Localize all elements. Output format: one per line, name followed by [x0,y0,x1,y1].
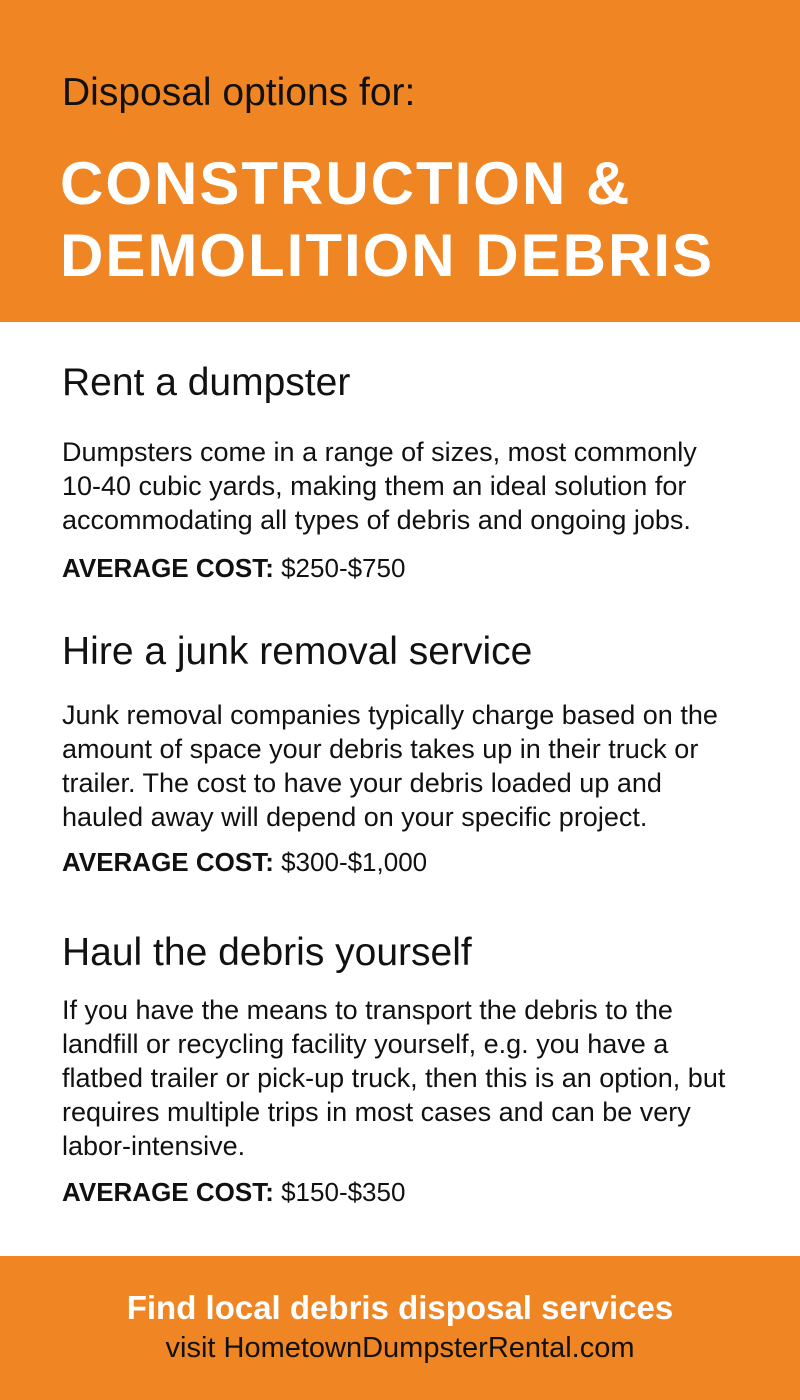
body text: Junk removal companies typically charge based on the [62,700,718,730]
cost: AVERAGE COST: $150-$350 [62,1177,405,1207]
cost: AVERAGE COST: $300-$1,000 [62,847,427,877]
heading: Rent a dumpster [62,361,350,404]
footer call to action: Find local debris disposal services [127,1289,673,1326]
body text [62,437,697,535]
main title [60,150,714,289]
body text: 10-40 cubic yards, making them an ideal solution for [62,471,686,501]
body text: flatbed trailer or pick-up truck, then this is an option, but [62,1063,725,1093]
section: haul yourself [62,931,726,1207]
cost: AVERAGE COST: $250-$750 [62,553,405,583]
main title: CONSTRUCTION & [60,150,631,217]
body text: amount of space your debris takes up in their truck or [62,734,698,764]
main title: DEMOLITION DEBRIS [60,222,714,289]
body text: accommodating all types of debris and ongoing jobs. [62,505,691,535]
section: rent a dumpster [62,361,697,583]
heading: Hire a junk removal service [62,630,532,673]
header banner [0,0,800,322]
body text: labor-intensive. [62,1131,245,1161]
body text: trailer. The cost to have your debris loaded up and [62,768,662,798]
body text: landfill or recycling facility yourself, e.g. you have a [62,1029,668,1059]
heading: Haul the debris yourself [62,931,472,974]
body text: requires multiple trips in most cases and can be very [62,1097,691,1127]
section: junk removal [62,630,718,877]
footer banner [0,1256,800,1400]
body text [62,995,726,1161]
body text [62,700,718,832]
footer url: visit HometownDumpsterRental.com [166,1332,634,1364]
body text: hauled away will depend on your specific project. [62,802,647,832]
body text: If you have the means to transport the debris to the [62,995,673,1025]
body text: Dumpsters come in a range of sizes, most commonly [62,437,697,467]
subtitle: Disposal options for: [62,71,415,114]
